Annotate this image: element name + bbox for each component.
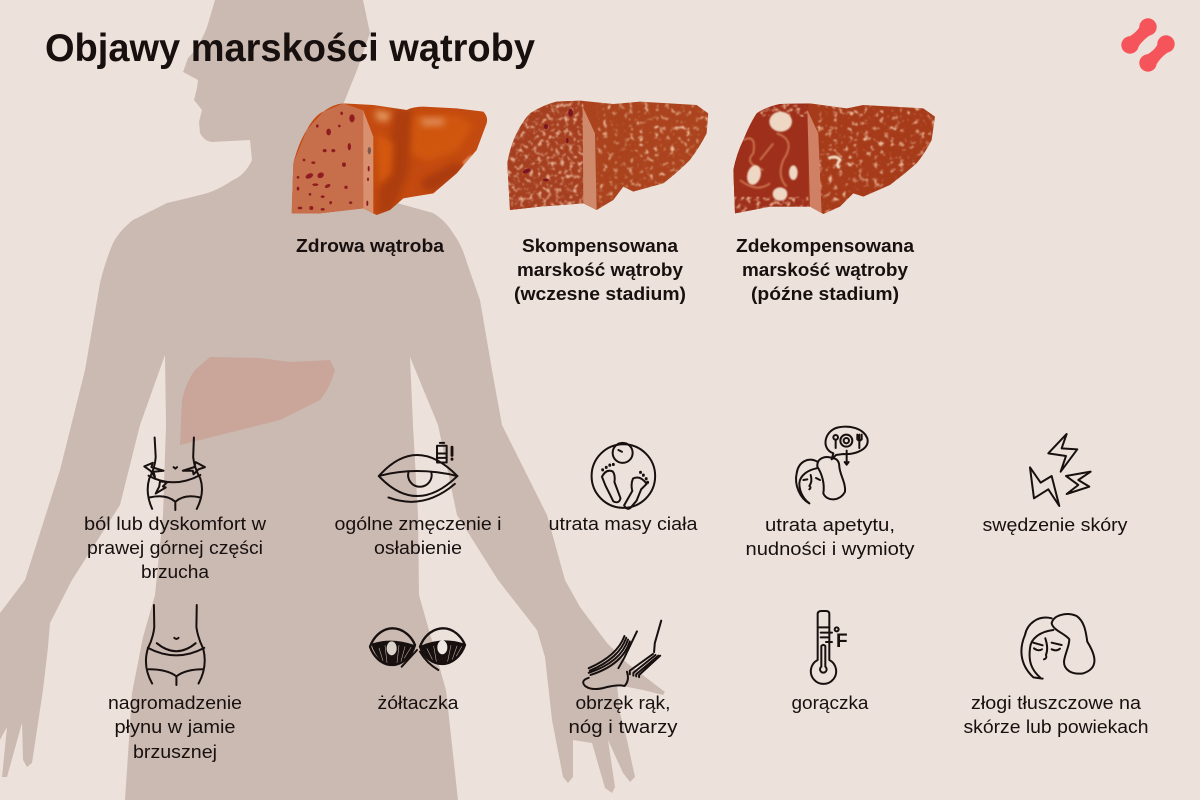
liver captions: (późne stadium) <box>751 284 899 304</box>
logo <box>1121 18 1175 72</box>
icon: woman with xanthelasma <box>1021 614 1094 679</box>
icon: loss of appetite <box>796 427 868 503</box>
symptom labels: row 2: złogi tłuszczowe na <box>971 693 1142 713</box>
liver: compensated cirrhosis <box>503 97 713 213</box>
symptom labels: row 2: skórze lub powiekach <box>964 717 1148 737</box>
symptom labels: row 1: prawej górnej części <box>87 538 263 558</box>
icon: swollen foot <box>583 621 661 689</box>
body silhouette <box>0 0 665 800</box>
symptom labels: row 1: nudności i wymioty <box>746 539 914 559</box>
symptom labels: row 2: żółtaczka <box>378 693 460 713</box>
symptom labels: row 1: ogólne zmęczenie i <box>334 514 502 534</box>
symptom labels: row 1: swędzenie skóry <box>982 515 1128 535</box>
symptom labels: row 1: utrata apetytu, <box>765 515 895 535</box>
symptom labels: row 2: nóg i twarzy <box>568 717 678 737</box>
symptom labels: row 1: brzucha <box>141 562 210 582</box>
icon: jaundice eyes <box>370 628 465 670</box>
symptom labels: row 1: ból lub dyskomfort w <box>84 514 267 534</box>
symptom labels: row 2: płynu w jamie <box>114 717 236 737</box>
liver captions: Skompensowana <box>522 236 679 256</box>
liver captions: (wczesne stadium) <box>514 284 686 304</box>
ghost liver inside body <box>180 357 335 445</box>
liver captions: marskość wątroby <box>742 260 908 280</box>
icon: abdominal pain <box>144 437 205 510</box>
title: Objawy marskości wątroby <box>45 27 535 70</box>
symptom labels: row 1 <box>84 514 1128 582</box>
liver captions: Zdekompensowana <box>736 236 915 256</box>
liver: healthy <box>292 103 488 215</box>
liver captions <box>296 236 915 304</box>
symptom labels: row 1: utrata masy ciała <box>548 514 699 534</box>
symptom labels: row 2: nagromadzenie <box>108 693 242 713</box>
symptom labels: row 2 <box>108 693 1148 762</box>
symptom labels: row 2: gorączka <box>792 693 870 713</box>
label: fahrenheit: F <box>836 631 848 652</box>
icon: tired eye <box>379 443 457 502</box>
icon: itching <box>1030 434 1091 506</box>
symptom labels: row 2: brzusznej <box>133 742 217 762</box>
liver captions: Zdrowa wątroba <box>296 236 445 256</box>
liver: decompensated cirrhosis <box>733 103 935 214</box>
icon: thermometer <box>811 611 839 684</box>
symptom labels: row 1: osłabienie <box>374 538 462 558</box>
symptom labels: row 2: obrzęk rąk, <box>576 693 670 713</box>
liver captions: marskość wątroby <box>517 260 683 280</box>
icon: abdominal fluid <box>146 605 205 685</box>
icon: weight scale <box>592 443 655 509</box>
